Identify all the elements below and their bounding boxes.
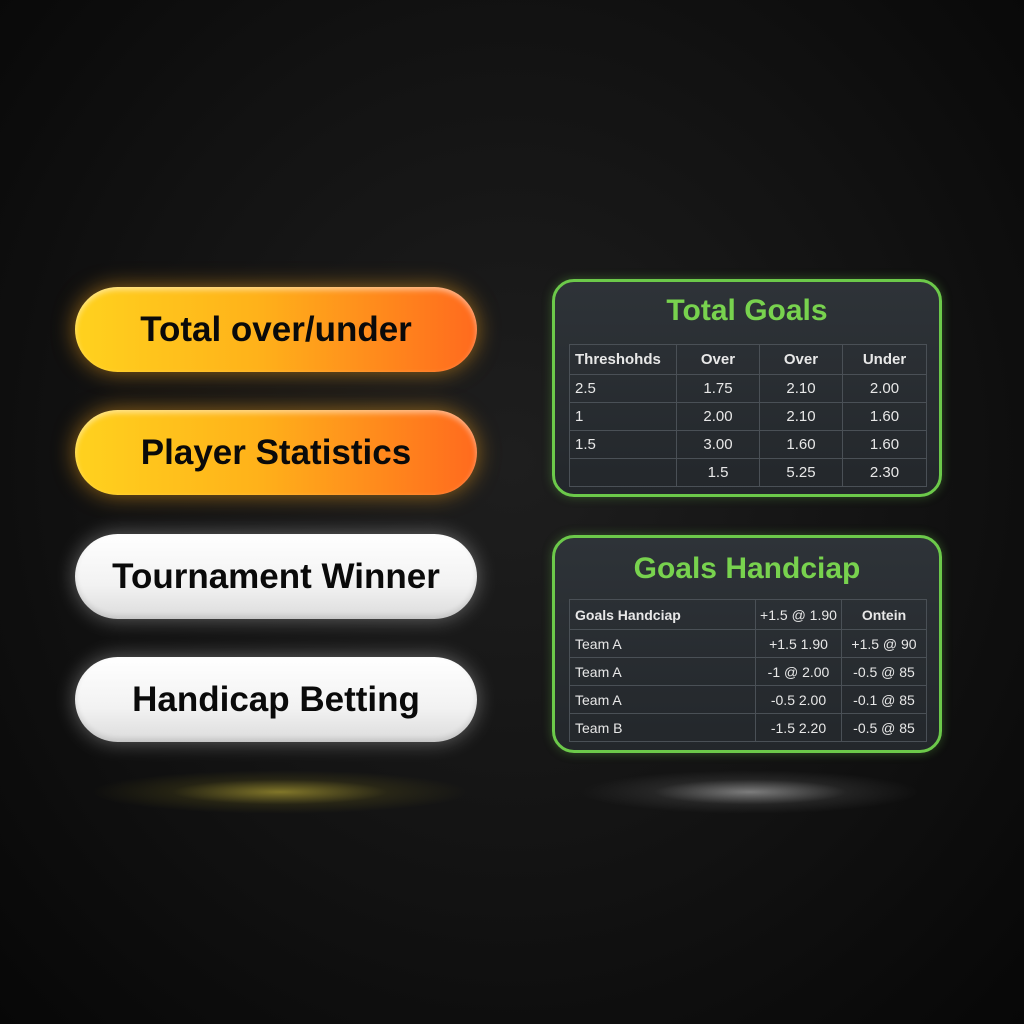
table: goals handicap: Ontein: [862, 606, 906, 622]
table: goals handicap: -1 @ 2.00: [768, 664, 829, 680]
heading: Goals Handciap: Goals Handciap: [634, 552, 860, 585]
table: goals handicap: +1.5 @ 1.90: [760, 606, 837, 622]
heading: Total Goals: Total Goals: [666, 294, 828, 327]
table: total goals: 2.10: [786, 380, 816, 397]
button: Total over/under: Total over/under: [140, 310, 412, 348]
glow: yellow floor: [90, 770, 470, 814]
table: total goals: 1.60: [786, 436, 816, 453]
table: goals handicap: Team A: [575, 692, 622, 708]
table: total goals: 2.00: [703, 408, 733, 425]
table: total goals: 2.5: [575, 380, 596, 397]
table: total goals: 3.00: [703, 436, 733, 453]
panel: Total Goals: [552, 279, 942, 497]
table: goals handicap: -0.1 @ 85: [853, 692, 915, 708]
button: Player Statistics: Player Statistics: [141, 432, 411, 472]
button: Handicap Betting: Handicap Betting: [132, 680, 420, 718]
table: total goals: Over: [701, 351, 735, 368]
button: Tournament Winner: Tournament Winner: [112, 556, 440, 596]
button: Total over/under: [75, 287, 477, 372]
table: goals handicap: +1.5 @ 90: [851, 636, 917, 652]
table: total goals: Under: [863, 351, 906, 368]
table: goals handicap: Team B: [575, 720, 622, 736]
table: total goals: Threshohds: [575, 351, 661, 368]
table: total goals: 2.10: [786, 408, 816, 425]
button: Player Statistics: [75, 410, 477, 495]
table: goals handicap: -0.5 @ 85: [853, 720, 915, 736]
table: total goals: 1.60: [870, 436, 899, 453]
table: total goals: 1: [575, 408, 583, 425]
button: Tournament Winner: [75, 534, 477, 619]
glow: white floor: [580, 770, 920, 814]
table: total goals: 5.25: [786, 464, 816, 481]
panel: Goals Handicap: [552, 535, 942, 753]
table: total goals: Over: [784, 351, 818, 368]
table: goals handicap: +1.5 1.90: [769, 636, 828, 652]
table: total goals: 2.30: [870, 464, 899, 481]
table: goals handicap: Team A: [575, 664, 622, 680]
table: total goals: 1.5: [575, 436, 596, 453]
table: goals handicap: -0.5 2.00: [771, 692, 826, 708]
table: goals handicap: -0.5 @ 85: [853, 664, 915, 680]
table: total goals: 1.75: [703, 380, 733, 397]
table: total goals: 1.60: [870, 408, 899, 425]
table: total goals: 2.00: [870, 380, 899, 397]
table: goals handicap: -1.5 2.20: [771, 720, 826, 736]
table: goals handicap: Goals Handciap: [575, 606, 681, 622]
table: total goals: [569, 344, 927, 487]
table: goals handicap: Team A: [575, 636, 622, 652]
table: total goals: 1.5: [708, 464, 728, 481]
button: Handicap Betting: [75, 657, 477, 742]
table: goals handicap: [569, 599, 927, 742]
